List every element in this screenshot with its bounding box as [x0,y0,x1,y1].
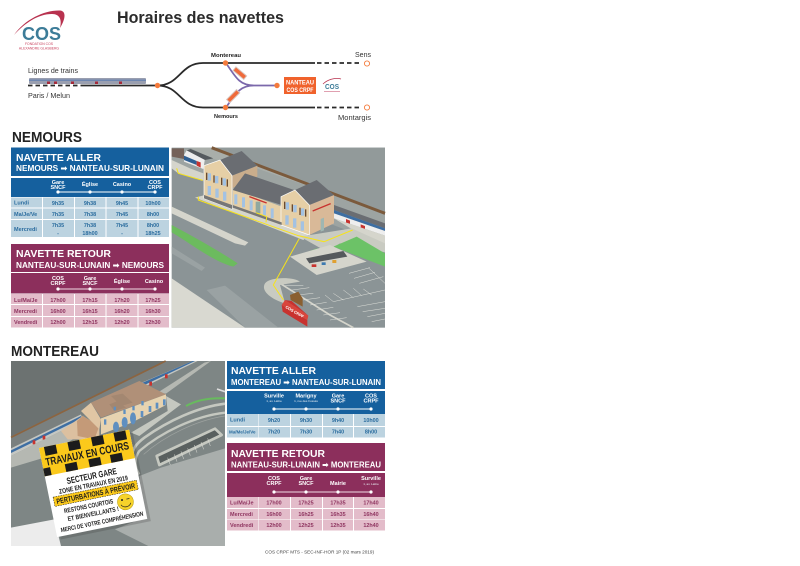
line labels: Montargis [338,113,371,122]
station building [61,416,99,439]
panel: Nemours retour: SNCF [83,281,98,287]
panel: Nemours aller: Lundi [14,200,29,206]
station labels: Nemours [214,114,238,120]
panel: Montereau retour: COS [268,476,280,482]
warning sign: travaux en cours: SECTEUR GARE [66,466,118,486]
lower grey area [115,448,225,546]
warning sign: travaux en cours: TRAVAUX EN COURS [44,440,130,469]
panel: Montereau aller: 1, rue des Fossés [294,399,318,403]
panel: Nemours retour: Église [114,277,130,285]
train illustration [29,78,146,84]
station nodes [155,60,280,110]
panel: Montereau aller: MONTEREAU ➡ NANTEAU-SUR-LUNAIN [231,378,381,387]
panel: Montereau aller: 7h40 [332,430,344,436]
panel: Nemours retour: COS [52,276,64,282]
panel: Nemours aller: Église [82,180,98,188]
parking [157,429,222,465]
panel: Montereau aller: SNCF [331,398,346,404]
panel: Montereau retour: NAVETTE RETOUR [231,448,325,460]
illustration: Nemours station [172,148,385,328]
panel: Nemours retour: Gare [84,276,96,282]
small COS logo [323,78,341,92]
icon: smiley [116,492,135,511]
panel: Montereau aller: Marigny [295,394,317,400]
panel: Nemours retour: 12h30 [145,320,161,326]
panel: Nemours retour: Casino [145,279,164,285]
panel: Montereau retour: 16h25 [298,512,314,518]
illustration: Montereau station [11,361,225,546]
footer reference: COS CRPF MTS - SEC-INF-HOR 1P (02 mars 2019) [265,550,374,556]
panel: Montereau retour: 17h25 [298,500,314,506]
panel: Montereau retour: Mercredi [230,512,253,518]
panel: Nemours retour: 17h00 [50,298,66,304]
panel: Montereau retour: Mairie [330,481,346,487]
line labels [28,50,371,122]
panel: Nemours aller: 7h38 [84,223,96,229]
panel: Montereau aller: 1, av. Lattre [266,399,282,403]
line labels: Paris / Melun [28,91,70,100]
panel: Montereau aller: 7h30 [300,430,312,436]
panel: Montereau retour: 12h00 [266,523,282,529]
panel: Montereau retour: Gare [300,476,312,482]
panel: Montereau retour: 12h40 [363,523,379,529]
panel: Nemours retour: 16h00 [50,309,66,315]
panel: Nemours aller: 8h00 [147,223,159,229]
title: Horaires des navettes [117,8,284,27]
panel: Montereau aller: 9h20 [268,418,280,424]
panel: Montereau retour: 12h35 [330,523,346,529]
panel: Montereau retour: Surville [361,476,381,482]
panel: Montereau aller: 9h40 [332,418,344,424]
destination box: NANTEAU [286,80,314,86]
panel: Montereau aller: 7h20 [268,430,280,436]
mini shuttles [227,67,247,103]
station labels [211,53,241,120]
panel: Nemours aller: - [57,231,59,237]
panel: Nemours aller: 7h38 [84,212,96,218]
panel: Nemours aller: 7h35 [52,212,64,218]
panel: Montereau retour: 1, av. Lattre [363,482,379,486]
warning sign: travaux en cours: PERTURBATIONS À PRÉVOIR [56,481,136,506]
shuttle branches [226,63,277,108]
rail network diagram [28,50,371,122]
train lines [28,63,362,108]
panel: Montereau retour: 12h25 [298,523,314,529]
panel: Nemours aller: NEMOURS ➡ NANTEAU-SUR-LUNAIN [16,164,164,173]
panel: Montereau aller: CRPF [364,398,379,404]
logo: COS foundation: ALEXANDRE GLASBERG [19,46,59,50]
panel: Nemours aller: CRPF [148,185,163,191]
warning sign: travaux en cours: ET BIENVEILLANTS ! [67,506,120,523]
panel: Nemours aller: NAVETTE ALLER [16,152,101,164]
panel: Montereau aller: 8h00 [365,430,377,436]
tracks and trains [11,414,83,456]
panel: Nemours aller [11,148,169,237]
panel: Nemours aller: Gare [52,180,64,186]
panel: Nemours retour: NAVETTE RETOUR [16,248,111,260]
panel: Nemours retour: 17h20 [114,298,130,304]
yellow pedestrian path [177,168,353,300]
shuttle bus: COS CRPF [285,304,305,319]
panel: Nemours aller: 9h38 [84,201,96,207]
trains [184,150,205,169]
panel: Montereau retour: 16h40 [363,512,379,518]
panel: Nemours retour: 12h20 [114,320,130,326]
panel: Nemours aller: - [121,231,123,237]
panel: Montereau retour: 16h35 [330,512,346,518]
panel: Nemours retour [11,244,169,328]
panel: Nemours retour: 12h00 [50,320,66,326]
panel: Nemours aller: 18h25 [145,231,161,237]
panel: Montereau aller: 9h30 [300,418,312,424]
panel: Nemours aller: COS [149,180,161,186]
panel: Montereau retour: Lu/Ma/Je [230,500,254,506]
panel: Montereau retour [227,443,385,530]
panel: Nemours aller: Casino [113,182,132,188]
panel: Nemours retour: 17h15 [82,298,98,304]
line labels: Lignes de trains [28,66,78,75]
panel: Nemours aller: 7h45 [116,223,128,229]
panel: Montereau aller: Gare [332,394,344,400]
destination box: COS CRPF [286,88,314,94]
panel: Montereau aller: Surville [264,394,284,400]
panel: Montereau aller: 10h00 [363,418,379,424]
warning sign: travaux en cours: ZONE EN TRAVAUX EN 2019 [59,475,129,496]
logo: COS foundation: FONDATION COS [25,42,54,46]
panel: Nemours aller: SNCF [51,185,66,191]
logo: COS foundation: COS [22,23,61,44]
panel: Montereau retour: CRPF [267,481,282,487]
panel: Nemours aller: 9h45 [116,201,128,207]
heading: Nemours: NEMOURS [12,130,82,146]
panel: Montereau retour: NANTEAU-SUR-LUNAIN ➡ MONTEREAU [231,460,381,470]
green road strip [186,398,225,406]
panel: Montereau aller: Lundi [230,418,245,424]
logo: COS foundation [14,10,64,50]
panel: Nemours retour: Mercredi [14,309,37,315]
panel: Nemours retour: Lu/Ma/Je [14,298,38,304]
panel: Nemours retour: NANTEAU-SUR-LUNAIN ➡ NEMOURS [16,261,165,270]
panel: Nemours retour: 16h30 [145,309,161,315]
station labels: Montereau [211,53,241,59]
shuttle bus [282,300,308,327]
panel: Nemours aller: Ma/Je/Ve [14,212,37,218]
panel: Nemours aller: 10h00 [145,201,161,207]
panel: Nemours retour: 16h20 [114,309,130,315]
panel: Nemours aller: Mercredi [14,227,37,233]
building [195,195,310,240]
panel: Montereau aller [227,361,385,438]
panel: Nemours aller: 8h00 [147,212,159,218]
panel: Nemours retour: Vendredi [14,320,38,326]
panel: Nemours aller: 18h00 [82,231,98,237]
panel: Montereau retour: 17h35 [330,500,346,506]
panel: Montereau retour: 17h00 [266,500,282,506]
panel: Nemours retour: 16h15 [82,309,98,315]
small COS logo: COS [325,84,339,91]
panel: Montereau aller: Ma/Me/Je/Ve [229,430,256,434]
panel: Nemours aller: 9h35 [52,201,64,207]
panel: Nemours retour: 12h15 [82,320,98,326]
panel: Nemours retour: CRPF [51,281,66,287]
terminus nodes [364,61,370,110]
road curves [131,404,225,458]
warning sign: travaux en cours [39,429,151,540]
panel: Montereau retour: 17h40 [363,500,379,506]
parvis and roads [172,207,248,246]
warning sign: travaux en cours: MERCI DE VOTRE COMPRÉHENSION [60,509,144,534]
parking [280,268,385,328]
panel: Nemours aller: 7h45 [116,212,128,218]
destination box [284,77,316,94]
heading: Montereau: MONTEREAU [11,344,99,360]
panel: Montereau aller: COS [365,394,377,400]
panel: Nemours aller: 7h35 [52,223,64,229]
panel: Montereau retour: 16h00 [266,512,282,518]
panel: Nemours retour: 17h25 [145,298,161,304]
panel: Montereau retour: Vendredi [230,523,254,529]
panel: Montereau aller: NAVETTE ALLER [231,365,316,377]
panel: Montereau retour: SNCF [299,481,314,487]
warning sign: travaux en cours: RESTONS COURTOIS [64,498,114,515]
line labels: Sens [355,50,371,59]
